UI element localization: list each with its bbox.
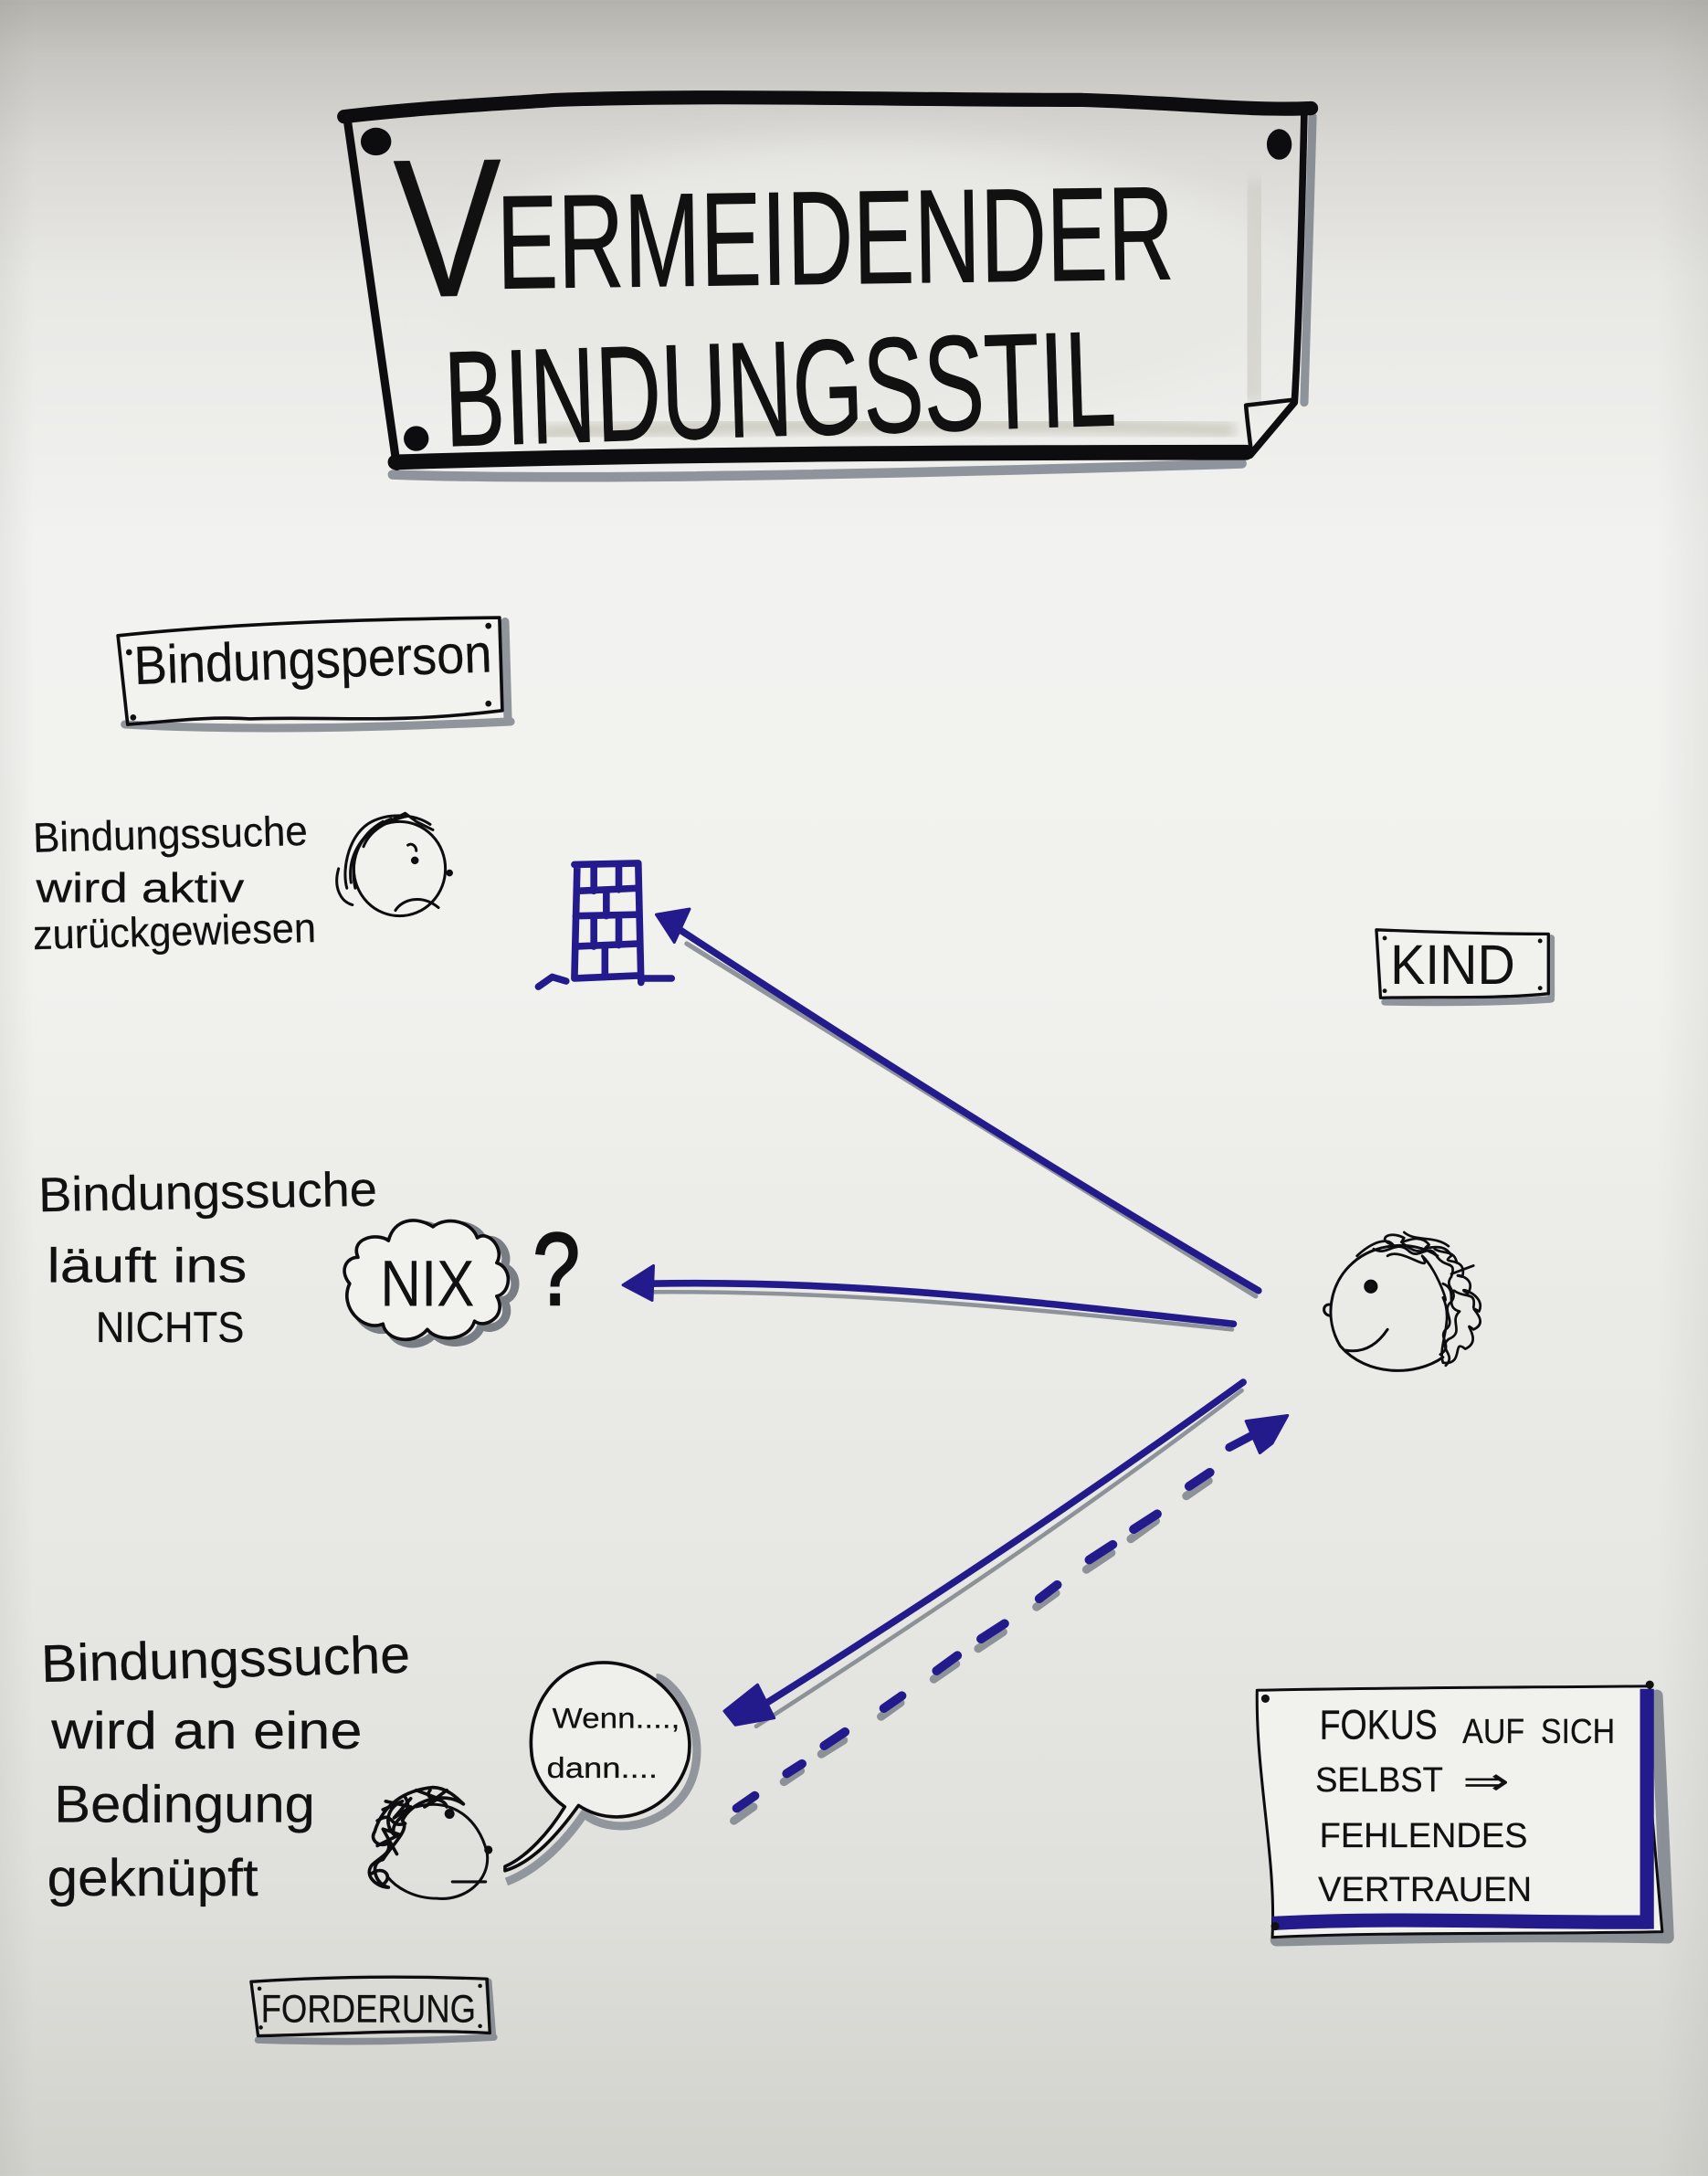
speech bubble: Wenn, dann: dann....	[547, 1751, 658, 1784]
text: Bindungssuche läuft ins NICHTS: Bindungssuche	[38, 1163, 377, 1222]
subtitle: BINDUNGSSTIL	[442, 301, 1118, 475]
callout: Fokus auf sich selbst: FEHLENDES	[1320, 1817, 1528, 1855]
icon: sad face	[337, 813, 451, 916]
text: Bindungssuche wird aktiv zurückgewiesen	[32, 808, 317, 958]
title: V	[393, 117, 503, 339]
text: Bindungssuche wird aktiv zurückgewiesen: wird aktiv	[35, 864, 245, 911]
icon: NIX cloud	[344, 1220, 515, 1344]
label: KIND: KIND	[1390, 934, 1515, 996]
text: Bindungssuche wird an eine Bedingung geknüpft: Bindungssuche	[40, 1626, 411, 1694]
label: KIND	[1376, 930, 1551, 1002]
arrow: from child to conditional demand	[724, 1382, 1243, 1727]
label: Bindungsperson	[118, 618, 511, 728]
text: Bindungssuche wird an eine Bedingung geknüpft: Bedingung	[54, 1776, 315, 1834]
label: FORDERUNG	[251, 1977, 494, 2042]
banner shadow	[393, 463, 1242, 477]
icon: question mark: ?	[532, 1211, 580, 1326]
text: Bindungssuche läuft ins NICHTS: NICHTS	[96, 1303, 244, 1351]
speech bubble: Wenn, dann: Wenn....,	[553, 1701, 680, 1734]
text: Bindungssuche wird an eine Bedingung geknüpft	[40, 1626, 411, 1907]
text: Bindungssuche wird aktiv zurückgewiesen: zurückgewiesen	[32, 904, 317, 958]
banner frame	[344, 98, 1312, 117]
callout: Fokus auf sich selbst: ⇒	[1462, 1760, 1510, 1802]
text: Bindungssuche läuft ins NICHTS: läuft ins	[47, 1240, 247, 1294]
icon: face with curls	[369, 1788, 491, 1898]
callout: Fokus auf sich selbst	[1257, 1681, 1668, 1940]
title	[393, 108, 1176, 339]
callout: Fokus auf sich selbst: FOKUS	[1320, 1701, 1438, 1748]
text: Bindungssuche wird an eine Bedingung geknüpft: wird an eine	[50, 1702, 362, 1760]
title banner	[344, 98, 1313, 477]
callout: Fokus auf sich selbst: VERTRAUEN	[1318, 1871, 1532, 1909]
text: Bindungssuche wird an eine Bedingung geknüpft: geknüpft	[47, 1849, 258, 1907]
label: Bindungsperson: Bindungsperson	[132, 622, 492, 696]
icon: NIX cloud: NIX	[380, 1247, 475, 1320]
title: ERMEIDENDER	[496, 158, 1175, 317]
speech bubble: Wenn, dann	[505, 1663, 697, 1882]
icon: happy child face	[1324, 1232, 1481, 1370]
arrow: dashed return	[734, 1416, 1288, 1821]
banner rivets	[361, 128, 1292, 451]
arrow: to wall	[657, 909, 1259, 1296]
arrow: to nothing	[623, 1265, 1233, 1329]
icon: brick wall	[538, 863, 671, 987]
text: Bindungssuche läuft ins NICHTS	[38, 1163, 377, 1351]
text: Bindungssuche wird aktiv zurückgewiesen: Bindungssuche	[32, 808, 308, 861]
callout: Fokus auf sich selbst: AUF SICH	[1462, 1713, 1615, 1751]
label: FORDERUNG: FORDERUNG	[261, 1987, 476, 2031]
callout: Fokus auf sich selbst: SELBST	[1315, 1761, 1443, 1800]
banner smudges	[541, 425, 1235, 433]
